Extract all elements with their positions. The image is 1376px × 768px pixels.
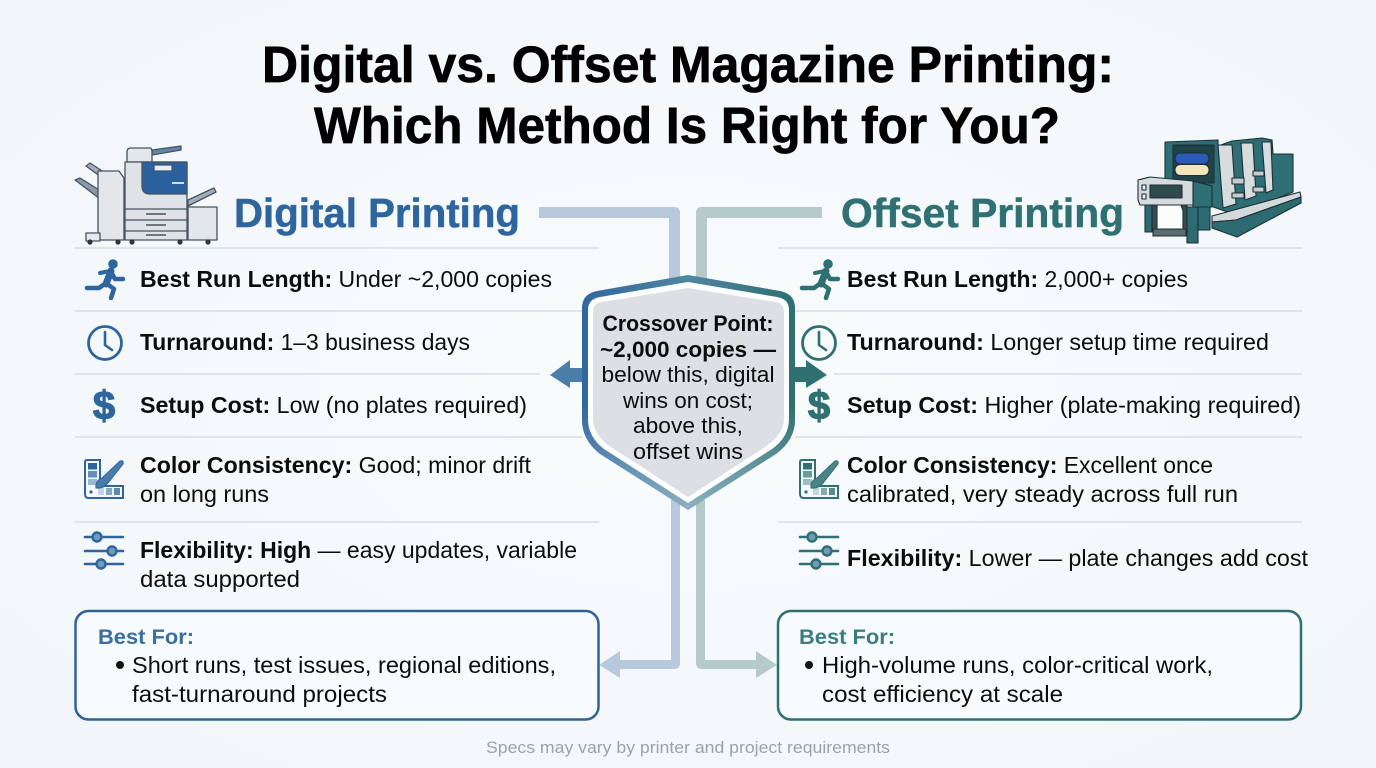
row: setup cost: Setup Cost: Low (no plates required) bbox=[140, 392, 527, 418]
row: setup cost: $ bbox=[93, 384, 115, 428]
callout: crossover shield: below this, digital bbox=[602, 362, 774, 387]
row: turnaround: Turnaround: 1–3 business days bbox=[140, 329, 470, 355]
heading: digital printing: Digital Printing bbox=[234, 190, 520, 236]
callout: crossover shield bbox=[582, 275, 795, 510]
row: best run length: Best Run Length: Under ~2,000 copies bbox=[140, 266, 552, 292]
callout: crossover shield: wins on cost; bbox=[622, 388, 753, 413]
arrow: toward offset bbox=[793, 360, 827, 388]
row: color consistency: Color Consistency: Excellent once bbox=[847, 452, 1213, 478]
callout: crossover shield: offset wins bbox=[633, 439, 743, 464]
title: Which Method Is Right for You? bbox=[314, 97, 1060, 154]
callout: crossover shield: Crossover Point: bbox=[602, 311, 774, 336]
row: flexibility: Flexibility: Lower — plate changes add cost bbox=[847, 545, 1309, 571]
row: color consistency bbox=[85, 452, 532, 507]
arrow: toward digital bbox=[550, 360, 584, 388]
row: flexibility bbox=[800, 532, 1309, 571]
row: color consistency: calibrated, very steady across full run bbox=[847, 481, 1238, 507]
title bbox=[262, 36, 1114, 154]
row: setup cost: $ bbox=[808, 384, 830, 428]
row: flexibility: data supported bbox=[140, 566, 300, 592]
row: setup cost bbox=[808, 384, 1301, 428]
row: setup cost: Setup Cost: Higher (plate-making required) bbox=[847, 392, 1301, 418]
row: turnaround bbox=[88, 326, 470, 360]
footer note: Specs may vary by printer and project requirements bbox=[486, 739, 890, 757]
row: turnaround: Turnaround: Longer setup time required bbox=[847, 329, 1269, 355]
heading: offset printing: Offset Printing bbox=[841, 190, 1124, 236]
title: Digital vs. Offset Magazine Printing: bbox=[262, 36, 1114, 93]
icon: digital press bbox=[75, 146, 217, 245]
connector: digital side bbox=[539, 207, 680, 678]
callout: crossover shield: above this, bbox=[633, 413, 743, 438]
panel: offset printing bbox=[778, 138, 1309, 720]
row: flexibility: Flexibility: High — easy updates, variable bbox=[140, 537, 577, 563]
callout: crossover shield: ~2,000 copies — bbox=[600, 337, 776, 362]
callout: digital best for: Best For: bbox=[98, 626, 194, 649]
row: best run length: Best Run Length: 2,000+ copies bbox=[847, 266, 1188, 292]
row: color consistency: Color Consistency: Good; minor drift bbox=[140, 452, 532, 478]
callout: offset best for: High-volume runs, color-critical work, bbox=[822, 652, 1213, 678]
callout: digital best for bbox=[76, 611, 598, 720]
row: color consistency: on long runs bbox=[140, 481, 269, 507]
icon: offset press bbox=[1138, 138, 1301, 243]
callout: offset best for: cost efficiency at scale bbox=[822, 681, 1063, 707]
row: color consistency bbox=[800, 452, 1238, 507]
row: setup cost bbox=[93, 384, 527, 428]
row: best run length bbox=[802, 259, 1188, 298]
callout: digital best for: Short runs, test issues, regional editions, bbox=[132, 652, 556, 678]
row: flexibility bbox=[85, 532, 577, 592]
callout: digital best for: fast-turnaround projects bbox=[132, 681, 387, 707]
panel: digital printing bbox=[75, 146, 599, 720]
connector: offset side bbox=[696, 207, 822, 678]
row: best run length bbox=[87, 259, 552, 298]
callout: offset best for bbox=[778, 611, 1301, 720]
callout: offset best for: Best For: bbox=[799, 626, 895, 649]
